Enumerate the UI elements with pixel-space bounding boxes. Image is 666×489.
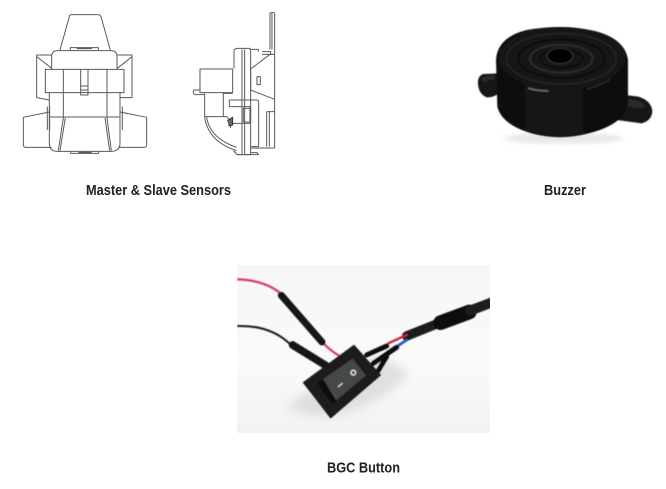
rocker symbol: circle xyxy=(351,370,356,375)
switch rocker xyxy=(323,359,366,401)
buzzer concentric ridges xyxy=(506,33,616,84)
black wire xyxy=(237,326,290,344)
red and blue leads xyxy=(388,335,407,343)
short black leads xyxy=(367,346,397,371)
label: Master & Slave Sensors: Master & Slave Sensors xyxy=(86,182,231,199)
buzzer body xyxy=(496,27,628,137)
icon: black buzzer photo xyxy=(478,27,652,144)
red wire xyxy=(237,279,341,357)
red wire sleeve xyxy=(281,295,322,342)
photo: BGC button with cables xyxy=(237,265,497,433)
icon: sensor front view line drawing xyxy=(23,15,147,153)
switch housing xyxy=(304,346,380,417)
buzzer left mounting tab xyxy=(478,73,502,97)
rocker symbol: line xyxy=(338,383,342,387)
label: BGC Button: BGC Button xyxy=(327,460,400,476)
black wire sleeve xyxy=(293,345,327,366)
icon: sensor side view line drawing xyxy=(193,13,275,155)
buzzer shadow xyxy=(503,133,623,144)
main cable xyxy=(407,323,438,336)
label: Buzzer: Buzzer xyxy=(544,182,586,199)
buzzer top face xyxy=(499,27,625,88)
buzzer rim highlight xyxy=(528,88,549,91)
buzzer right mounting tab xyxy=(617,94,652,123)
switch drop shadow xyxy=(287,353,410,416)
buzzer centre hole xyxy=(548,49,572,63)
photo background xyxy=(237,265,490,433)
